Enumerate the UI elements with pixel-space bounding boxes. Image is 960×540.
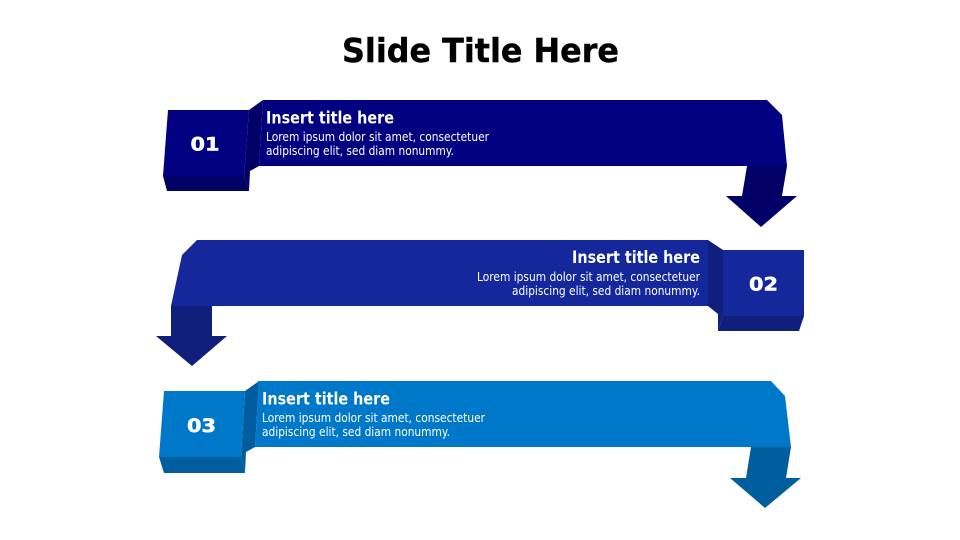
text block: step 02 body: Lorem ipsum dolor sit amet, consectetuer bbox=[477, 269, 701, 284]
heading: step 01 title: Insert title here bbox=[266, 108, 394, 128]
text block: step 01 body bbox=[266, 129, 490, 158]
arrow: step 02 down arrow bbox=[156, 306, 227, 366]
box: step 03 number face bbox=[159, 391, 245, 457]
arrow: step 03 down arrow bbox=[730, 447, 801, 508]
title: Slide Title Here bbox=[342, 31, 619, 70]
fold: step 01 ribbon fold bbox=[244, 100, 263, 191]
panel: step 01 bbox=[163, 100, 797, 227]
fold: step 02 ribbon fold bbox=[708, 240, 723, 331]
text block: step 02 body: adipiscing elit, sed diam nonummy. bbox=[512, 283, 700, 298]
number: 03: 03 bbox=[187, 415, 216, 437]
text block: step 01 body: Lorem ipsum dolor sit amet, consectetuer bbox=[266, 129, 490, 144]
heading: step 02 title: Insert title here bbox=[572, 248, 700, 268]
box: step 01 number face bbox=[163, 110, 249, 176]
text block: step 03 body bbox=[262, 410, 486, 439]
ribbon: step 01 band bbox=[259, 100, 787, 166]
panel: step 03 bbox=[159, 381, 801, 508]
heading: step 03 title: Insert title here bbox=[262, 390, 390, 410]
box bottom: step 01 lower face bbox=[163, 176, 249, 191]
number: 02: 02 bbox=[749, 274, 778, 296]
panel: step 02 bbox=[156, 240, 804, 366]
box bottom: step 03 lower face bbox=[159, 457, 245, 473]
box bottom: step 02 lower face bbox=[718, 316, 804, 331]
box: step 02 number face bbox=[723, 250, 804, 316]
fold: step 03 ribbon fold bbox=[241, 381, 259, 473]
arrow: step 01 down arrow bbox=[726, 166, 797, 227]
ribbon: step 02 band bbox=[171, 240, 708, 306]
text block: step 02 body bbox=[477, 269, 701, 298]
ribbon: step 03 band bbox=[255, 381, 791, 447]
text block: step 01 body: adipiscing elit, sed diam nonummy. bbox=[266, 143, 454, 158]
text block: step 03 body: adipiscing elit, sed diam nonummy. bbox=[262, 424, 450, 439]
text block: step 03 body: Lorem ipsum dolor sit amet, consectetuer bbox=[262, 410, 486, 425]
number: 01: 01 bbox=[190, 134, 220, 156]
